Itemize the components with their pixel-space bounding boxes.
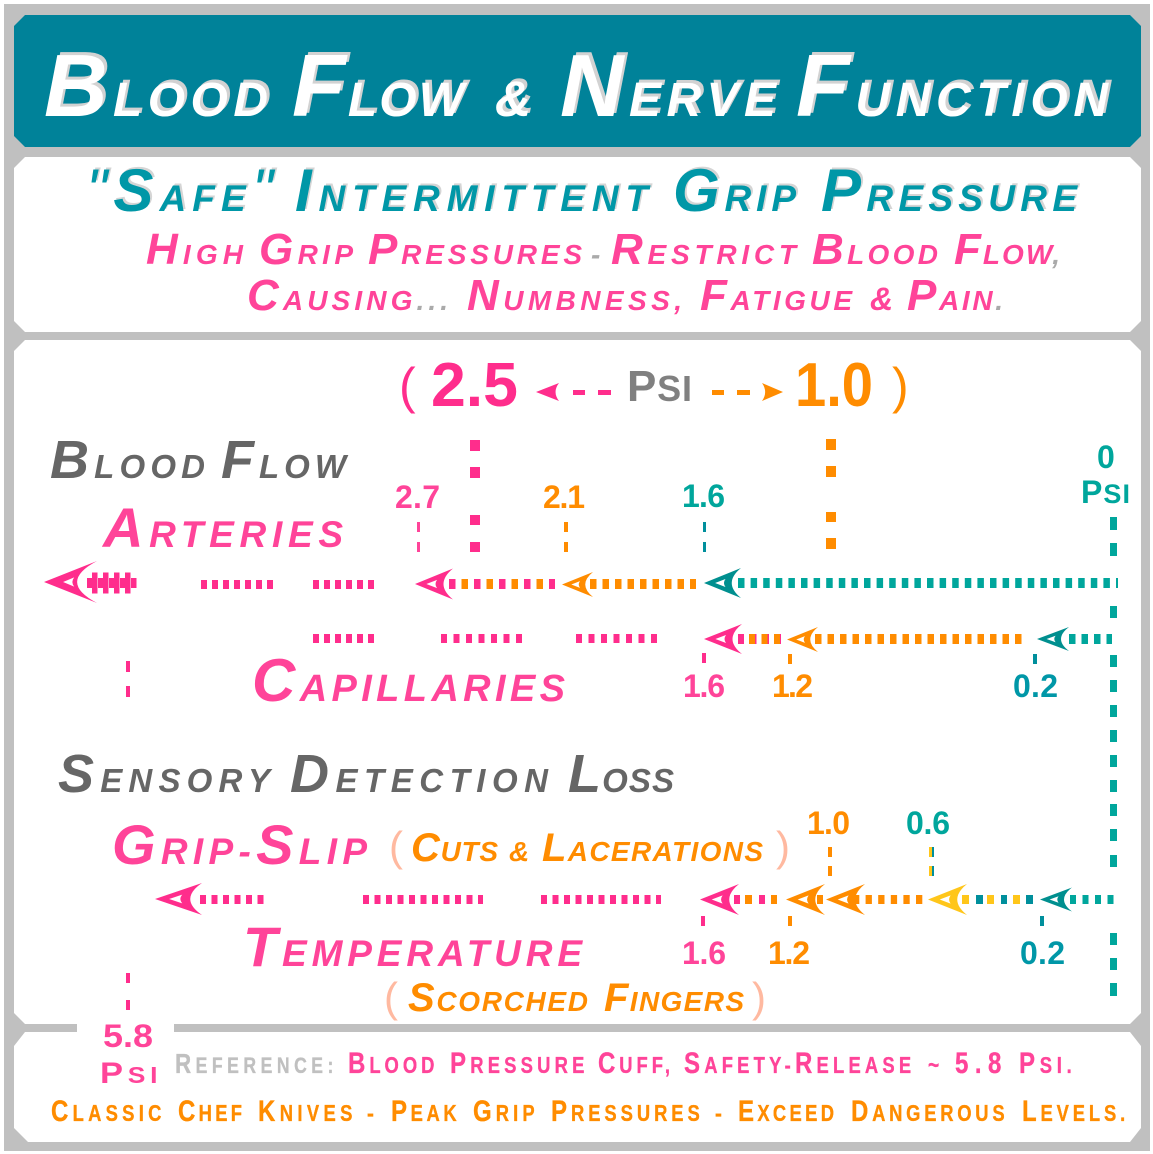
warning text: & (870, 281, 893, 317)
arteries values (395, 478, 725, 552)
capillaries values: 0.2 (1013, 668, 1058, 704)
note: scorched fingers: ( (384, 974, 398, 1021)
heading: sensory detection loss: SENSORY (58, 744, 273, 804)
warning text: - (591, 239, 600, 270)
note: cuts and lacerations: & (509, 836, 529, 867)
chef knives line: GRIP (473, 1093, 535, 1128)
safe pressure range 2.5 to 1.0 psi: ( (399, 358, 416, 414)
reference line: CUFF, (598, 1045, 670, 1080)
chef knives line: PRESSURES (551, 1093, 700, 1128)
title: & (495, 71, 531, 127)
note: scorched fingers: FINGERS (604, 976, 744, 1020)
heading: sensory detection loss: LOSS (568, 744, 674, 804)
sensory upper values: 0.6 (906, 805, 950, 841)
safe pressure range 2.5 to 1.0 psi: ) (892, 358, 909, 414)
warning text: FLOW, (954, 225, 1060, 274)
panel: title banner (14, 15, 1141, 147)
note: scorched fingers: ) (752, 974, 766, 1021)
arteries values: 2.1 (543, 479, 585, 515)
subtitle: PRESSURE (821, 157, 1078, 224)
chef knives line: - (367, 1100, 374, 1126)
panel: pressure chart (14, 340, 1141, 1024)
subtitle: GRIP (673, 157, 796, 224)
warning text: NUMBNESS, (467, 271, 682, 320)
warning text: RESTRICT (611, 225, 799, 274)
chef knives line: - (715, 1100, 722, 1126)
capillaries values (683, 653, 1058, 704)
reference line: REFERENCE: (175, 1049, 333, 1080)
subtitle: "SAFE" (86, 157, 276, 224)
warning text (146, 225, 1060, 320)
capillaries values: 1.2 (772, 668, 813, 704)
subtitle: INTERMITTENT (295, 157, 651, 224)
safe pressure range 2.5 to 1.0 psi: 2.5 (431, 351, 518, 420)
warning text: HIGH (146, 225, 244, 274)
reference line: BLOOD (348, 1045, 434, 1080)
note: cuts and lacerations (389, 823, 790, 870)
markers: 2.5 and 1.0 drop lines (470, 439, 836, 552)
tick: left capillaries (126, 661, 130, 697)
title (44, 36, 1109, 135)
sensory lower values: 1.2 (768, 935, 810, 971)
reference line: SAFETY-RELEASE (684, 1045, 911, 1080)
arteries values: 1.6 (682, 478, 725, 514)
safe pressure range 2.5 to 1.0 psi (399, 351, 909, 420)
sensory arrow row (155, 883, 1114, 915)
sensory lower values (682, 916, 1065, 971)
chef knives line: PEAK (391, 1093, 457, 1128)
sensory upper values (807, 805, 950, 876)
chef knives line (51, 1093, 1125, 1128)
heading: sensory detection loss: DETECTION (290, 744, 549, 804)
note: scorched fingers (384, 974, 766, 1021)
label: temperature: TEMPERATURE (243, 915, 583, 978)
label: 5.8 psi: PSI (100, 1056, 158, 1089)
sensory lower values: 0.2 (1020, 935, 1065, 971)
warning text: BLOOD (812, 225, 938, 274)
safe pressure range 2.5 to 1.0 psi: PSI (627, 362, 692, 411)
chef knives line: EXCEED (738, 1093, 834, 1128)
chef knives line: LEVELS. (1022, 1093, 1125, 1128)
heading: blood flow (50, 430, 349, 490)
label: capillaries: CAPILLARIES (252, 647, 565, 714)
zero psi label (1081, 439, 1130, 510)
warning text: PAIN. (907, 271, 1003, 320)
chef knives line: CLASSIC (51, 1093, 161, 1128)
subtitle (86, 157, 1078, 224)
warning text: GRIP (259, 225, 353, 274)
capillaries values: 1.6 (683, 668, 725, 704)
panel: footer (14, 1018, 1141, 1142)
reference line: ~ (928, 1051, 939, 1079)
reference line (175, 1045, 1072, 1080)
note: cuts and lacerations: CUTS (411, 826, 498, 870)
reference line: PRESSURE (450, 1045, 584, 1080)
label: arteries: ARTERIES (101, 496, 343, 559)
title: BLOOD (44, 36, 268, 135)
zero psi label: PSI (1081, 474, 1130, 510)
heading: blood flow: BLOOD (50, 430, 205, 490)
capillaries arrow row (313, 624, 1112, 654)
chef knives line: CHEF (178, 1093, 242, 1128)
label: grip-slip: GRIP-SLIP (112, 813, 367, 876)
safe pressure range 2.5 to 1.0 psi: 1.0 (795, 351, 873, 420)
note: cuts and lacerations: ( (389, 823, 403, 870)
note: cuts and lacerations: LACERATIONS (542, 826, 763, 870)
arteries values: 2.7 (395, 479, 440, 515)
title: NERVE (560, 36, 778, 135)
heading: sensory detection loss (58, 744, 674, 804)
reference line: PSI. (1019, 1045, 1072, 1080)
panel: safe intermittent grip pressure (14, 157, 1141, 332)
label: 5.8 psi (100, 1018, 158, 1089)
sensory lower values: 1.6 (682, 935, 726, 971)
tick: 5.8 psi (126, 973, 130, 1010)
chef knives line: DANGEROUS (851, 1093, 1005, 1128)
note: scorched fingers: SCORCHED (408, 976, 588, 1020)
warning text: CAUSING... (247, 271, 448, 320)
gap in divider (77, 1024, 174, 1034)
chef knives line: KNIVES (258, 1093, 352, 1128)
reference line: 5.8 (955, 1045, 1001, 1080)
zero psi vertical axis (1110, 517, 1117, 996)
title: FUNCTION (796, 36, 1109, 135)
label: 5.8 psi: 5.8 (103, 1018, 153, 1054)
warning text: PRESSURES (368, 225, 582, 274)
note: cuts and lacerations: ) (776, 823, 790, 870)
heading: blood flow: FLOW (221, 430, 349, 490)
sensory upper values: 1.0 (807, 805, 850, 841)
warning text: FATIGUE (700, 271, 853, 320)
arteries arrow row (44, 561, 1118, 603)
zero psi label: 0 (1097, 439, 1115, 475)
title: FLOW (292, 36, 468, 135)
